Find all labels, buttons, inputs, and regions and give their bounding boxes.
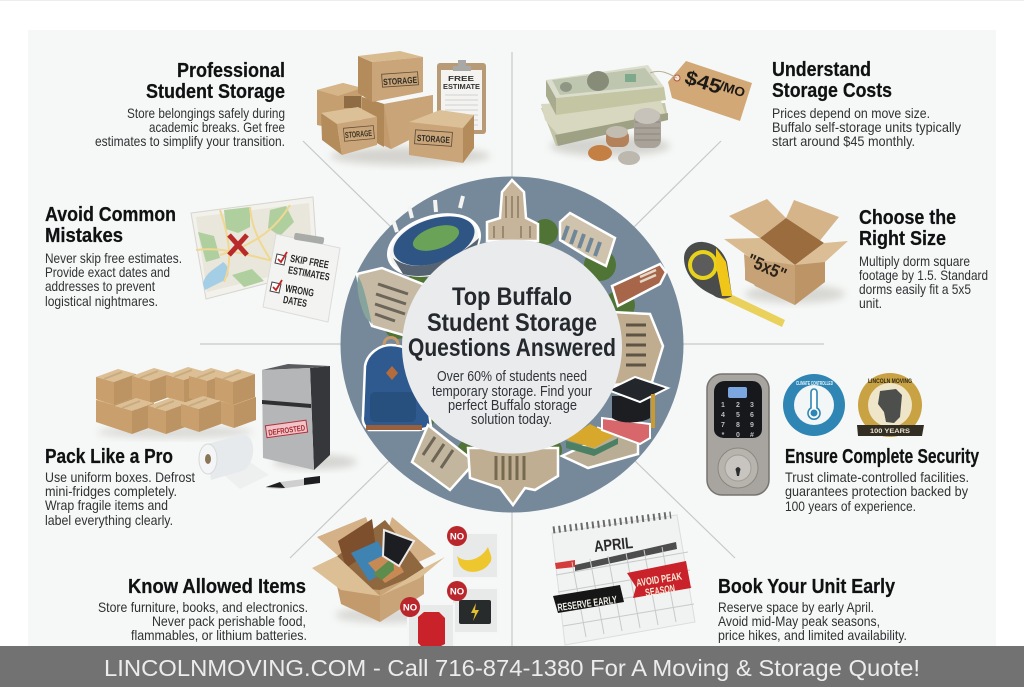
panel: understand storage costs (541, 58, 961, 165)
clip (294, 233, 324, 244)
back left box (317, 83, 362, 130)
box faces (744, 254, 795, 305)
text: avoid common mistakes: addresses to prevent (45, 278, 155, 294)
icon: open box 5x5 (724, 199, 848, 305)
building dome (357, 276, 372, 324)
keypad digits: 7 (721, 422, 725, 429)
heading: pack like a pro: Pack Like a Pro (45, 445, 173, 468)
text: understand storage costs: Buffalo self-storage units typically (772, 119, 961, 135)
brick windows (640, 270, 656, 282)
building body (357, 268, 425, 340)
checklist text: SKIP FREE (289, 253, 330, 271)
yellow book (566, 424, 614, 448)
no badge (447, 581, 467, 601)
text: avoid common mistakes: logistical nightmares. (45, 293, 158, 309)
floodlights (393, 196, 463, 232)
icon: climate controlled badge (783, 374, 845, 436)
heading: book your unit early: Book Your Unit Early (718, 575, 896, 598)
heading: know allowed items: Know Allowed Items (128, 575, 306, 598)
icon: tape measure (684, 242, 785, 327)
panel: ensure complete security (707, 373, 979, 514)
tape side grip (716, 248, 732, 296)
text: professional student storage: academic breaks. Get free (149, 119, 285, 135)
heading: professional student storage: Professional (177, 59, 285, 82)
building body (468, 448, 558, 505)
inner disc (868, 383, 912, 427)
text: know allowed items (98, 599, 308, 643)
coins (588, 108, 661, 165)
defrosted label: DEFROSTED (268, 423, 306, 437)
text: choose the right size: unit. (859, 295, 882, 311)
keypad digits: * (722, 432, 725, 439)
central hub (340, 176, 684, 512)
clipboard: FREE (448, 74, 474, 83)
fridge top (262, 364, 330, 370)
tablet (383, 530, 414, 566)
intro text: perfect Buffalo storage (448, 398, 577, 414)
intro text: Over 60% of students need (437, 369, 587, 385)
text: book your unit early: price hikes, and limited availability. (718, 627, 907, 643)
calendar grid (556, 547, 694, 637)
icon: lincoln moving 100 years badge (857, 373, 924, 437)
tape hub (692, 254, 714, 276)
no badge (447, 526, 467, 546)
back flaps (729, 199, 786, 238)
marker (266, 477, 320, 489)
avoid peak text (636, 570, 683, 599)
gold disc (858, 373, 922, 437)
map parks (198, 206, 294, 287)
icon: checklist note (263, 233, 340, 322)
price tag: $45 (682, 67, 724, 99)
price tag: /MO (718, 78, 747, 100)
shadow (335, 607, 435, 623)
text: avoid common mistakes: Provide exact dates and (45, 264, 170, 280)
heading: avoid common mistakes: Avoid Common (45, 203, 176, 226)
text: pack like a pro (45, 469, 195, 528)
keypad panel (714, 381, 762, 438)
pack pocket (370, 392, 416, 422)
building windows (375, 284, 408, 321)
tower windows (494, 196, 530, 238)
text: pack like a pro: Wrap fragile items and (45, 497, 168, 513)
middle box (362, 95, 433, 149)
no text: NO (450, 532, 464, 542)
front flap left (312, 556, 380, 596)
battery (459, 600, 491, 624)
title (408, 283, 616, 362)
text: ensure complete security: 100 years of experience. (785, 498, 916, 514)
heading: choose the right size (859, 206, 956, 250)
text: understand storage costs: Prices depend on move size. (772, 105, 930, 121)
fridge door (262, 368, 314, 470)
checklist text: DATES (282, 294, 308, 310)
boxes (96, 392, 136, 428)
no badge (400, 597, 420, 617)
text: choose the right size: footage by 1.5. Standard (859, 267, 988, 283)
marker cap (266, 476, 320, 488)
text: know allowed items: flammables, or lithium batteries. (131, 627, 307, 643)
shadow (330, 147, 490, 165)
text: pack like a pro: mini-fridges completely. (45, 483, 177, 499)
checklist text (282, 253, 331, 310)
stadium stands (387, 207, 481, 275)
avoid peak text: AVOID PEAK (636, 570, 683, 590)
left front box: STORAGE (345, 128, 373, 140)
upper books (602, 418, 650, 444)
map land (196, 203, 313, 292)
text: choose the right size: dorms easily fit a 5x5 (859, 281, 971, 297)
fridge door gap (262, 400, 311, 408)
tape body (684, 242, 732, 299)
sticker: lower center building (468, 448, 558, 505)
building body (612, 312, 663, 385)
heading: understand storage costs: Understand (772, 58, 871, 81)
text: avoid common mistakes (45, 250, 182, 309)
sticker: backpack (363, 338, 431, 430)
map water (203, 262, 229, 290)
footer text: LINCOLNMOVING.COM - Call 716-874-1380 For A Moving & Storage Quote! (104, 655, 920, 681)
text: book your unit early: Reserve space by early April. (718, 599, 874, 615)
panel: pack like a pro (45, 364, 357, 528)
panel: know allowed items (98, 517, 498, 650)
heading: choose the right size: Right Size (859, 227, 946, 250)
panel: avoid common mistakes (45, 197, 340, 322)
pack handle (384, 338, 398, 345)
outer ring (783, 374, 845, 436)
icon: bubble wrap and marker (199, 435, 320, 489)
building windows (626, 325, 646, 365)
text: ensure complete security: Trust climate-controlled facilities. (785, 469, 969, 485)
icon: stacked uniform boxes (96, 367, 256, 438)
tape yellow ring (688, 250, 718, 280)
inner circle (402, 240, 622, 454)
icon: storage boxes and clipboard (317, 51, 490, 165)
keypad digits: 6 (750, 412, 754, 419)
building columns (423, 437, 453, 468)
stadium base (393, 238, 479, 276)
card (452, 588, 498, 633)
title: Questions Answered (408, 334, 616, 362)
checkboxes (270, 254, 286, 293)
title: Top Buffalo (452, 283, 572, 311)
ribbon (857, 425, 924, 436)
brick body (612, 264, 666, 306)
keypad digits: 9 (750, 422, 754, 429)
right front box (409, 110, 474, 163)
sticker: lower left building (412, 425, 475, 490)
text: book your unit early (718, 599, 907, 643)
text: book your unit early: Avoid mid-May peak seasons, (718, 613, 880, 629)
tower silhouette (487, 180, 538, 241)
box interior (760, 218, 824, 265)
icon: mini fridge defrosted (262, 364, 357, 470)
footer band (0, 646, 1024, 687)
price tag (650, 61, 752, 121)
keyhole (736, 467, 740, 476)
cash stacks (541, 65, 668, 146)
icon: no flammables (400, 597, 454, 650)
right front box: STORAGE (417, 133, 450, 145)
text: professional student storage: Store belongings safely during (127, 105, 285, 121)
intro text (432, 369, 592, 428)
icon: smart lock (707, 374, 769, 495)
keypad digits: 8 (736, 422, 740, 429)
calendar sheet (552, 515, 695, 645)
check marks (273, 252, 287, 290)
sticker: right building (612, 312, 663, 385)
gas can (418, 612, 445, 646)
checklist text: WRONG (284, 283, 315, 300)
pack patch (386, 366, 398, 380)
text: know allowed items: Store furniture, books, and electronics. (98, 599, 308, 615)
month: APRIL (593, 535, 634, 556)
card (408, 604, 454, 650)
sticker: brick building (612, 264, 666, 306)
inner disc (794, 385, 834, 425)
lower books (562, 428, 638, 468)
pack body (363, 345, 431, 430)
heading: professional student storage: Student Storage (146, 80, 285, 103)
sticker: graduation cap and books (562, 377, 668, 468)
ring text: CLIMATE CONTROLLED (796, 381, 833, 387)
back flaps (317, 517, 372, 562)
title: Student Storage (427, 309, 597, 337)
wrap sheet (218, 462, 269, 489)
wood board (338, 519, 376, 568)
avoid peak ribbon (627, 561, 691, 598)
cap crown (612, 396, 650, 422)
roll end (199, 444, 217, 474)
text: ensure complete security: guarantees protection backed by (785, 483, 968, 499)
building body (560, 213, 615, 266)
text: pack like a pro: Use uniform boxes. Defrost (45, 469, 195, 485)
icon: april calendar (552, 515, 695, 645)
sticker: city hall tower (487, 180, 538, 241)
box front right (380, 572, 424, 622)
card (452, 533, 498, 578)
sticker: trees (384, 219, 635, 465)
reserve early ribbon (553, 585, 624, 613)
keypad digits: 1 (721, 402, 725, 409)
green book (566, 438, 618, 456)
avoid peak text: SEASON (644, 583, 676, 599)
keypad digits: 3 (750, 402, 754, 409)
text: choose the right size (859, 253, 988, 311)
top box: STORAGE (383, 75, 417, 87)
map sheet (191, 197, 318, 299)
keypad digits: # (750, 432, 754, 439)
thermometer (808, 389, 820, 419)
text: professional student storage (95, 105, 285, 149)
top box (358, 51, 423, 102)
front panel fill (745, 258, 795, 305)
spoke dividers (200, 52, 824, 646)
pack base (366, 425, 422, 430)
text: ensure complete security (785, 469, 969, 514)
keypad digits (721, 402, 754, 439)
sticker: left domed building (357, 268, 425, 340)
text: understand storage costs: start around $45 monthly. (772, 133, 915, 149)
sticker: stadium (381, 196, 487, 286)
header bar (575, 542, 677, 571)
battery bolt (471, 603, 479, 621)
shadow (745, 285, 845, 303)
ring text: LINCOLN MOVING (868, 379, 912, 385)
shadow (97, 426, 253, 438)
no text: NO (403, 602, 417, 614)
size label: "5x5" (744, 250, 790, 285)
heading: understand storage costs: Storage Costs (772, 79, 892, 102)
icon: open box with books and tablet (312, 517, 445, 623)
front flap right (380, 557, 445, 596)
text: avoid common mistakes: Never skip free estimates. (45, 250, 182, 266)
building columns (496, 456, 524, 480)
icon: no bananas (447, 526, 498, 578)
thermometer mercury (810, 410, 818, 416)
top edge (0, 0, 1024, 1)
tape blade (718, 290, 785, 327)
keypad digits: 0 (736, 432, 740, 439)
icon: map with red x (191, 197, 318, 299)
sticker: columned building top right (560, 213, 615, 266)
intro text: temporary storage. Find your (432, 384, 592, 400)
panel: professional student storage (95, 51, 490, 165)
display (728, 387, 747, 398)
outer circle (340, 176, 684, 512)
front flaps (724, 238, 795, 265)
panel: book your unit early (552, 515, 907, 645)
header red (555, 560, 575, 569)
tassel (651, 394, 655, 428)
deadbolt knob (718, 448, 758, 488)
lincoln head (878, 389, 902, 423)
icon: cash, coins and price tag (541, 61, 752, 165)
stadium outer (381, 204, 487, 286)
icon: no batteries (447, 581, 498, 633)
ribbon text: 100 YEARS (870, 428, 911, 435)
binding (553, 515, 671, 530)
no text: NO (450, 586, 464, 598)
clipboard: ESTIMATE (443, 82, 480, 91)
left front box (321, 107, 377, 155)
note sheet (263, 234, 340, 322)
intro text: solution today. (471, 412, 552, 428)
lock body (707, 374, 769, 495)
building body (412, 425, 475, 490)
cap board (608, 377, 668, 402)
roll core (205, 454, 211, 464)
fridge side (310, 366, 330, 470)
text: choose the right size: Multiply dorm square (859, 253, 970, 269)
books (351, 541, 392, 581)
keypad digits: 4 (721, 412, 725, 419)
box interior (336, 520, 424, 596)
heading: avoid common mistakes (45, 203, 176, 247)
stadium field (410, 220, 462, 256)
keypad digits: 5 (736, 412, 740, 419)
keypad digits: 2 (736, 402, 740, 409)
heading: professional student storage (146, 59, 285, 103)
map roads (196, 205, 290, 282)
text: know allowed items: Never pack perishable food, (152, 613, 306, 629)
box front left (337, 586, 380, 622)
clipboard (437, 60, 486, 134)
heading: choose the right size: Choose the (859, 206, 956, 229)
building columns (563, 226, 600, 256)
roll (207, 435, 253, 480)
banana (457, 547, 491, 572)
panel: choose the right size (684, 199, 988, 327)
heading: understand storage costs (772, 58, 892, 102)
fridge shadow (273, 455, 357, 469)
deadbolt inner (725, 455, 751, 481)
shadow (550, 136, 670, 156)
checklist text: ESTIMATES (287, 264, 331, 284)
text: pack like a pro: label everything clearly. (45, 512, 173, 528)
text: professional student storage: estimates to simplify your transition. (95, 133, 285, 149)
red x (229, 235, 247, 255)
reserve early text: RESERVE EARLY (557, 594, 618, 614)
heading: avoid common mistakes: Mistakes (45, 224, 123, 247)
text: understand storage costs (772, 105, 961, 149)
